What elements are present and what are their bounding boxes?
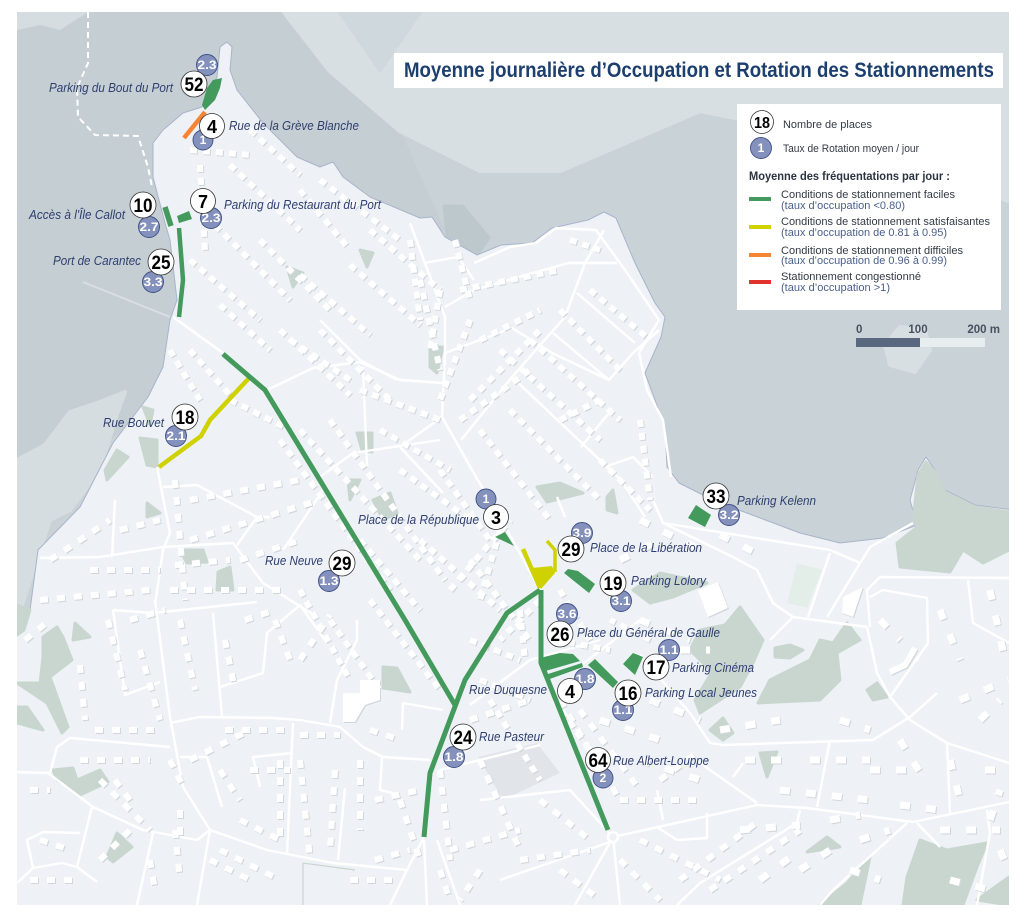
rue Bouvet [159,377,250,467]
Parking Cinéma: 1.1 [660,643,679,657]
Parking Local Jeunes: Parking Local Jeunes [645,686,757,700]
legend: rotation rate [750,138,919,158]
Rue Duquesne: 4 [565,682,575,702]
rues Neuve, Duquesne [223,354,455,705]
parking Cinéma [623,653,643,675]
legend: number of places: 18 [754,115,770,132]
Rue Albert-Louppe: Rue Albert-Louppe [613,754,709,768]
Place de la Libération: 29 [562,540,580,561]
Parking du Bout du Port: 2.3 [198,58,217,72]
Place du Général de Gaulle [547,604,720,647]
legend: satisfactory [749,216,990,239]
scale bar: 100 [908,324,928,336]
legend: number of places [750,110,872,134]
title [394,53,1003,88]
Rue de la Grève Blanche: 1 [200,133,207,147]
parking Kelenn [688,505,711,527]
legend: easy: Conditions de stationnement faciles [781,189,955,201]
legend: difficult: Conditions de stationnement difficiles [781,245,963,257]
Place de la République: Place de la République [358,513,479,527]
port de Carantec [179,228,183,317]
Rue Neuve: Rue Neuve [265,554,323,568]
Parking Kelenn: 3.2 [720,508,739,522]
Rue Albert-Louppe: 64 [588,751,608,772]
scale bar: 200 m [967,324,1000,336]
Parking Kelenn: 33 [706,487,726,508]
Port de Carantec [53,249,174,292]
Parking Cinéma [643,640,754,680]
Rue Pasteur: Rue Pasteur [479,730,545,744]
rue Albert-Louppe and central road [541,590,608,830]
legend: difficult: (taux d’occupation de 0.96 à 0.99) [781,255,947,267]
green areas [17,250,1009,905]
parking Lolory [564,569,595,593]
Parking Local Jeunes [612,680,757,720]
Port de Carantec: 3.3 [144,275,163,289]
Rue Bouvet [103,404,198,446]
legend: easy: (taux d’occupation <0.80) [781,200,905,212]
Parking Lolory [600,570,707,612]
place de la République [495,532,514,546]
Place de la République [358,489,508,530]
Parking Lolory: Parking Lolory [631,574,707,588]
parking du Restaurant du Port [177,211,192,223]
Accès à l'Île Callot: 10 [134,196,152,217]
legend: easy [749,189,955,212]
legend: congested [749,271,921,294]
Accès à l'Île Callot [28,192,160,238]
legend: number of places: Nombre de places [783,119,872,131]
Place de la Libération: 3.9 [572,526,592,540]
Rue Duquesne: 1.8 [576,672,595,686]
Port de Carantec: Port de Carantec [53,254,142,268]
legend: rotation rate: Taux de Rotation moyen / jour [783,143,919,155]
legend: congested: Stationnement congestionné [781,271,921,283]
Rue Neuve [265,550,355,592]
Rue Bouvet: Rue Bouvet [103,416,164,430]
parking Local Jeunes [588,659,618,688]
Parking Cinéma: Parking Cinéma [672,661,754,675]
roads [17,223,1009,905]
Rue Pasteur: 1.8 [444,750,464,764]
Parking Local Jeunes: 1.1 [614,703,633,717]
Rue Pasteur [444,724,545,768]
Parking Kelenn: Parking Kelenn [737,494,816,508]
Place du Général de Gaulle: Place du Général de Gaulle [577,626,720,640]
legend: difficult [749,245,963,267]
place du Général de Gaulle [540,653,580,672]
accès à l'Île Callot [165,207,171,226]
legend: congested: (taux d’occupation >1) [781,282,890,294]
Rue Bouvet: 2.1 [166,429,186,443]
Rue Bouvet: 18 [176,408,194,429]
Accès à l'Île Callot: Accès à l'Île Callot [28,207,125,222]
Parking du Bout du Port: 52 [184,75,204,96]
Rue Duquesne: Rue Duquesne [469,683,547,697]
rue Pasteur line [424,590,540,837]
Parking du Restaurant du Port: 7 [198,192,208,212]
Rue de la Grève Blanche [193,114,359,150]
Rue Neuve: 29 [332,554,352,575]
Rue Albert-Louppe [586,748,709,788]
Parking Lolory: 19 [604,574,622,595]
Rue de la Grève Blanche: 4 [207,117,217,137]
Parking Cinéma: 17 [646,658,666,679]
Parking du Bout du Port: Parking du Bout du Port [49,81,173,95]
Place du Général de Gaulle: 26 [550,625,570,646]
Parking du Restaurant du Port [190,188,381,228]
scale bar [856,324,1000,347]
Parking du Bout du Port [49,54,218,97]
Place de la Libération: Place de la Libération [590,541,702,555]
Place de la République: 1 [483,492,490,506]
legend: rotation rate: 1 [758,141,765,155]
Parking du Restaurant du Port: Parking du Restaurant du Port [224,198,381,212]
Rue Neuve: 1.3 [320,574,339,588]
Place du Général de Gaulle: 3.6 [558,607,577,621]
Accès à l'Île Callot: 2.7 [140,220,159,234]
legend: satisfactory: Conditions de stationnement satisfaisantes [781,216,990,228]
parking segments [159,78,711,837]
Parking du Restaurant du Port: 2.3 [202,211,221,225]
Rue de la Grève Blanche: Rue de la Grève Blanche [229,119,359,133]
Parking Local Jeunes: 16 [618,684,638,705]
rue de la Grève Blanche [184,112,205,138]
rue Duquesne strip [545,663,583,680]
Parking Lolory: 3.1 [612,594,631,608]
site badges and labels [28,54,816,788]
parking du Bout du Port [202,78,222,110]
legend [737,104,1001,310]
legend: satisfactory: (taux d’occupation de 0.81 à 0.95) [781,227,947,239]
Rue Duquesne [469,668,596,704]
scale bar: 0 [856,324,862,336]
Place de la République: 3 [491,508,501,528]
Rue Pasteur: 24 [454,728,473,749]
Place de la Libération [558,522,702,562]
legend heading: Moyenne des fréquentations par jour : [749,171,950,183]
Parking Kelenn [703,483,816,526]
place de la Libération [523,541,555,589]
Port de Carantec: 25 [152,253,171,274]
Rue Albert-Louppe: 2 [600,771,607,785]
dashed path to the island [77,12,152,187]
